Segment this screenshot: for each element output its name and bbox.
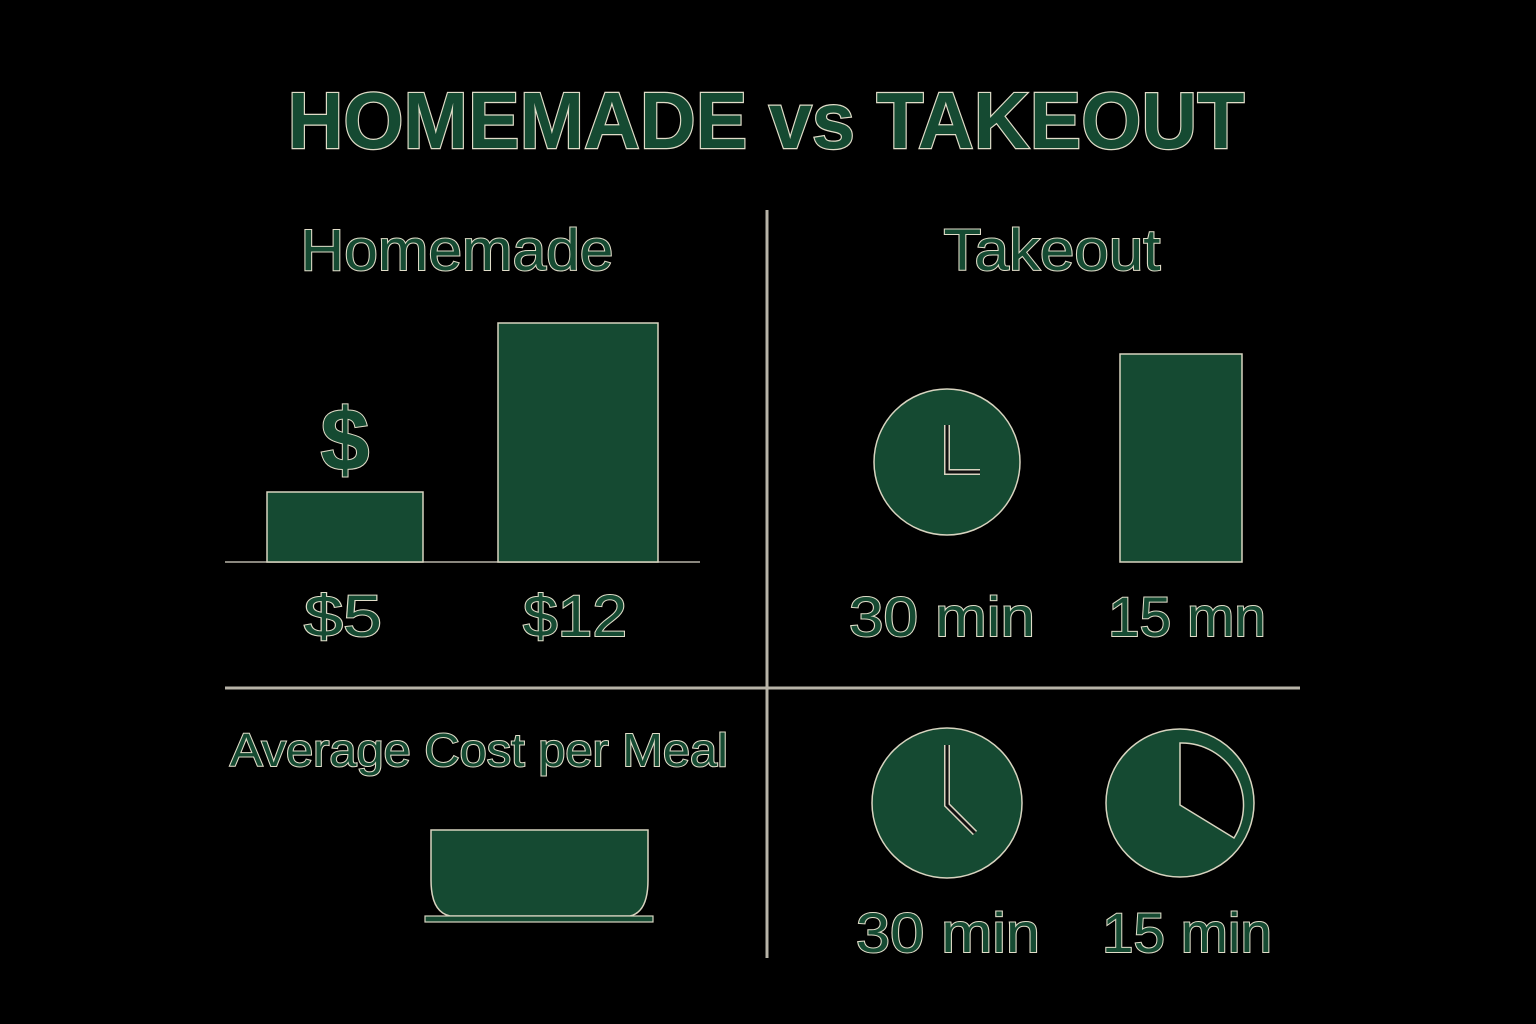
panel: takeout	[849, 218, 1266, 648]
icon: dollar sign: $	[321, 390, 369, 489]
icon: bowl	[425, 830, 653, 922]
panel: homemade	[225, 218, 700, 649]
label: $5: $5	[304, 584, 382, 649]
label: 30 min: 30 min	[856, 901, 1040, 964]
heading: Homemade: Homemade	[300, 218, 614, 283]
title: HOMEMADE vs TAKEOUT	[288, 76, 1245, 165]
label: $12: $12	[523, 584, 627, 649]
bar chart: cost	[225, 323, 700, 562]
icon: pie 15 min	[1106, 729, 1254, 877]
label: 15 min: 15 min	[1102, 901, 1272, 964]
label: 30 min: 30 min	[849, 585, 1035, 648]
panel: time comparison	[856, 728, 1272, 964]
icon: clock 30 min	[872, 728, 1022, 878]
label: 15 mn: 15 mn	[1108, 585, 1266, 648]
icon: clock	[874, 389, 1020, 535]
panel: average cost	[230, 724, 728, 922]
bar: takeout time	[1120, 354, 1242, 562]
heading: Takeout: Takeout	[944, 218, 1160, 283]
heading: Average Cost per Meal: Average Cost per Meal	[230, 724, 728, 776]
